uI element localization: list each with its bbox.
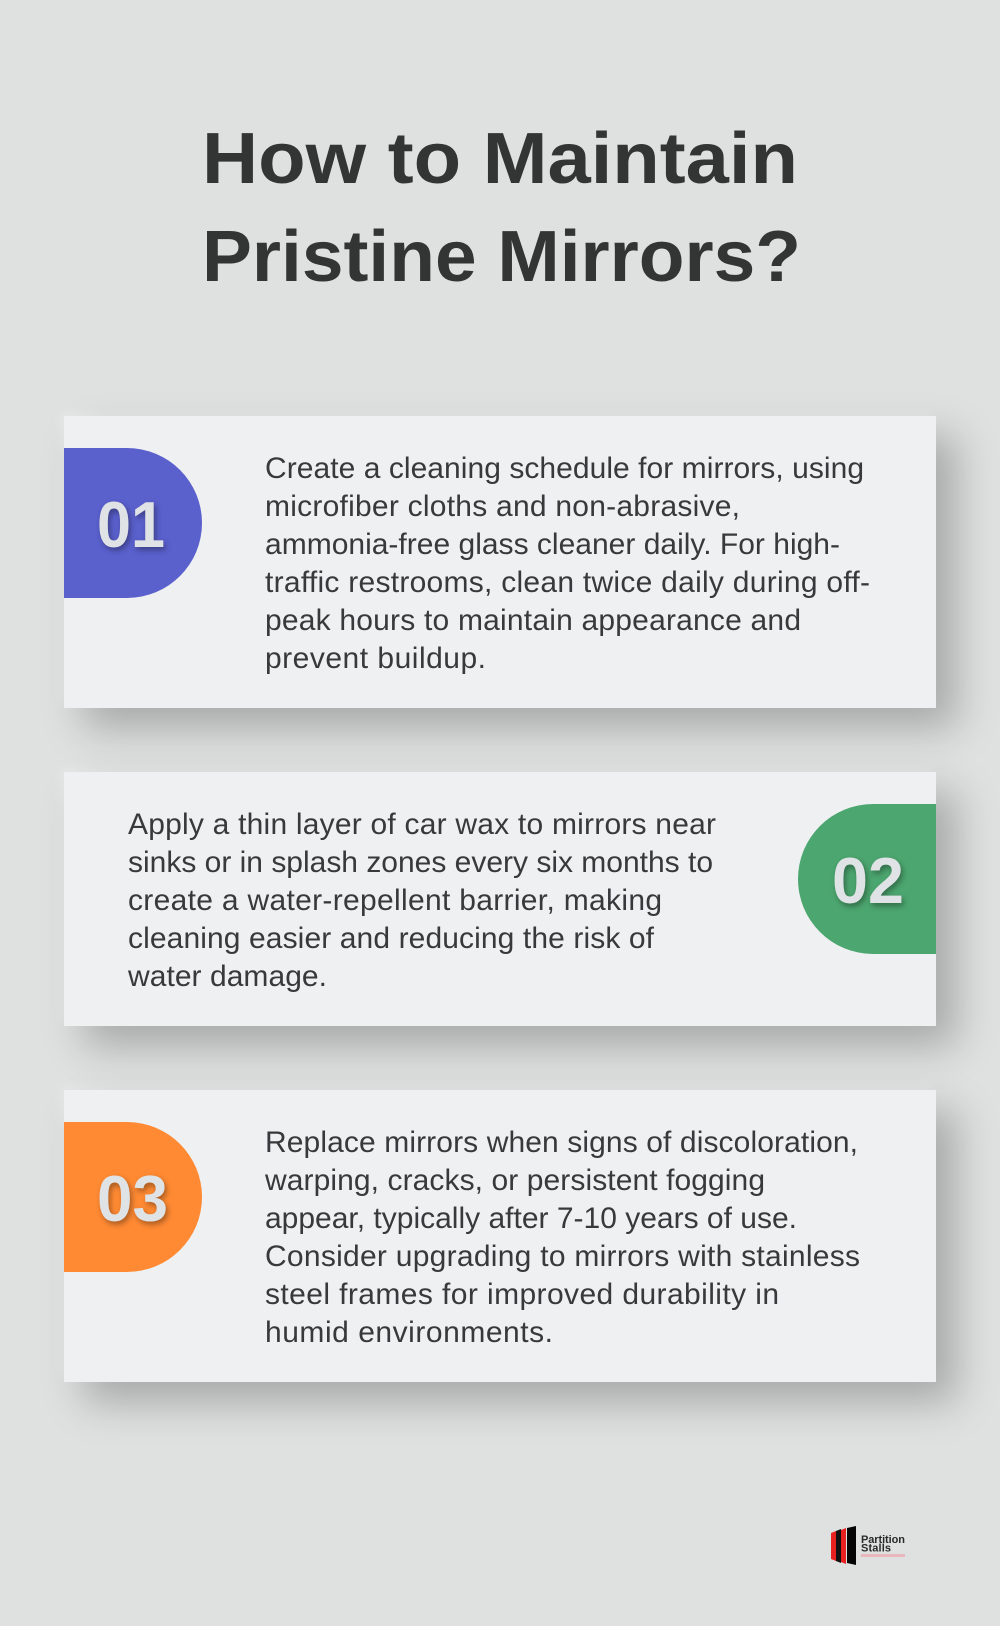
text: step 3: steel frames for improved durability in <box>265 1278 779 1311</box>
text: step 3: Consider upgrading to mirrors with stainless <box>265 1240 860 1273</box>
text: step 1 <box>265 452 870 675</box>
text: step 1: peak hours to maintain appearance and <box>265 604 801 637</box>
badge: step 1 <box>64 448 202 598</box>
number 02: 02 <box>832 844 904 917</box>
title: How to Maintain <box>202 119 798 199</box>
text: step 2: create a water-repellent barrier, making <box>128 884 662 917</box>
text: step 2: sinks or in splash zones every six months to <box>128 846 713 879</box>
text: step 3: humid environments. <box>265 1316 553 1349</box>
badge: step 3 <box>64 1122 202 1272</box>
text: step 1: ammonia-free glass cleaner daily. For high- <box>265 528 840 561</box>
badge: step 2 <box>798 804 936 954</box>
title <box>202 119 801 297</box>
logo: Partition Stalls: Partition <box>861 1534 905 1546</box>
text: step 1: traffic restrooms, clean twice daily during off- <box>265 566 870 599</box>
panel: step 3 card <box>64 1090 936 1382</box>
text: step 3: appear, typically after 7-10 years of use. <box>265 1202 797 1235</box>
text: step 2: water damage. <box>127 960 327 993</box>
text: step 1: Create a cleaning schedule for mirrors, using <box>265 452 864 485</box>
number 01: 01 <box>97 488 165 561</box>
panel: step 2 card <box>64 772 936 1026</box>
title: Pristine Mirrors? <box>202 217 801 297</box>
number 03: 03 <box>97 1162 168 1235</box>
text: step 2: cleaning easier and reducing the risk of <box>128 922 655 955</box>
text: step 1: prevent buildup. <box>265 642 486 675</box>
panel: step 1 card <box>64 416 936 708</box>
text: step 3: Replace mirrors when signs of discoloration, <box>265 1126 858 1159</box>
logo: Partition Stalls: Stalls <box>861 1542 891 1554</box>
logo: Partition Stalls <box>831 1526 905 1565</box>
text: step 3 <box>264 1126 860 1349</box>
text: step 3: warping, cracks, or persistent fogging <box>264 1164 765 1197</box>
text: step 1: microfiber cloths and non-abrasive, <box>265 490 740 523</box>
text: step 2 <box>127 808 716 993</box>
text: step 2: Apply a thin layer of car wax to mirrors near <box>128 808 716 841</box>
